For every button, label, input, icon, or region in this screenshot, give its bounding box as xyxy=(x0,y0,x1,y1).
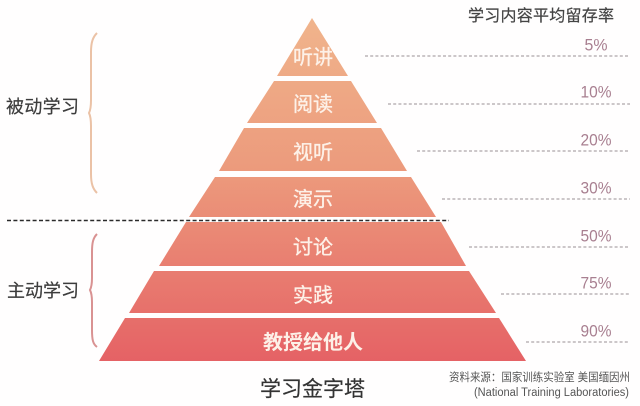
label: demonstration: 演示 xyxy=(293,188,333,211)
source note english: (National Training Laboratories) xyxy=(474,387,629,399)
pyramid layer: teaching others xyxy=(99,318,526,361)
pyramid xyxy=(99,18,526,361)
label: teaching others: 教授给他人 xyxy=(263,331,363,354)
active learning label: 主动学习 xyxy=(7,281,79,301)
pyramid title: 学习金字塔 xyxy=(260,378,365,401)
label: practice: 实践 xyxy=(293,284,333,307)
active learning brace xyxy=(90,234,97,347)
retention header: 学习内容平均留存率 xyxy=(468,7,614,25)
label: listening: 听讲 xyxy=(293,46,333,69)
pyramid layer: audiovisual xyxy=(219,128,407,171)
passive learning label: 被动学习 xyxy=(6,97,79,117)
label: audiovisual: 视听 xyxy=(293,141,333,164)
pyramid layer: reading xyxy=(247,81,377,123)
value 5%: 5% xyxy=(584,36,608,54)
value 90%: 90% xyxy=(580,322,612,340)
label: reading: 阅读 xyxy=(293,93,333,116)
value 30%: 30% xyxy=(580,180,612,198)
pyramid layer: demonstration xyxy=(189,177,436,217)
pyramid layer labels xyxy=(263,46,363,354)
passive learning brace xyxy=(89,33,97,193)
divider between passive and active learning xyxy=(7,220,449,222)
pyramid layer: practice xyxy=(129,271,496,313)
value 75%: 75% xyxy=(580,274,612,292)
value 10%: 10% xyxy=(580,84,612,102)
pyramid layer: listening xyxy=(277,18,348,76)
label: discussion: 讨论 xyxy=(293,236,333,259)
retention leader lines xyxy=(365,56,630,342)
value 50%: 50% xyxy=(580,228,612,246)
pyramid layer: discussion xyxy=(159,222,466,266)
value 20%: 20% xyxy=(580,132,612,150)
retention percentages xyxy=(580,36,612,340)
